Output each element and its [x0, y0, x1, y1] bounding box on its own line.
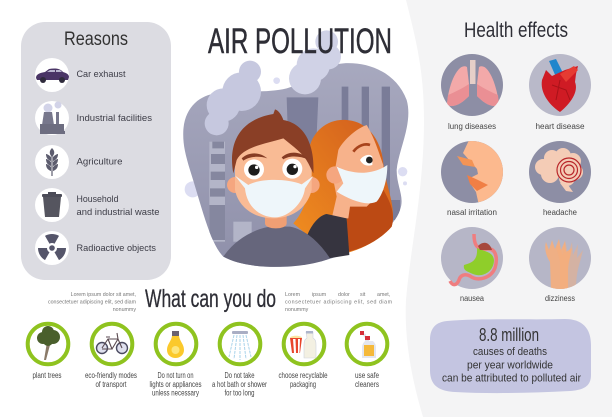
action: eco-friendly transport [85, 324, 137, 389]
action: lights [150, 324, 202, 398]
lorem text right: amet, [377, 292, 390, 298]
item: industrial facilities [35, 101, 152, 135]
action: lights: lights or appliances [150, 380, 202, 389]
lorem text right: consectetuer adipiscing elit, sed diam [285, 300, 393, 306]
item: car exhaust [35, 58, 126, 92]
callout: statistic: can be attributed to polluted air [442, 372, 581, 384]
effect: headache [529, 141, 591, 217]
smoke clouds [205, 61, 261, 135]
illustration: two people in masks [180, 30, 420, 273]
lorem text right: nonummy [285, 307, 309, 313]
action: eco-friendly transport: of transport [96, 380, 127, 389]
action: recyclable packaging: packaging [290, 380, 316, 389]
right background panel [406, 0, 612, 417]
lorem text right: Lorem [285, 292, 301, 298]
lorem text left [48, 292, 137, 313]
effect: heart disease [529, 54, 591, 131]
action: lights: unless necessary [152, 388, 199, 398]
effect: headache: headache [543, 208, 578, 217]
effect: heart disease: heart disease [536, 122, 585, 131]
polluted factory scene [183, 63, 408, 267]
effect: nausea [441, 227, 503, 303]
action: eco-friendly transport: eco-friendly modes [85, 371, 137, 380]
effect: dizziness: dizziness [545, 294, 575, 303]
item: agriculture [35, 145, 122, 179]
item: radioactive objects [35, 231, 156, 265]
lorem text right [285, 292, 393, 313]
panel: reasons [21, 22, 171, 280]
lorem text right: ipsum [312, 292, 327, 298]
decorative bubbles [185, 77, 407, 197]
callout: statistic: 8.8 million [479, 325, 539, 345]
effect: nasal irritation [441, 141, 503, 215]
action: plant trees: plant trees [32, 371, 62, 380]
item: household and industrial waste: and industrial waste [76, 207, 160, 218]
item: household and industrial waste: Household [76, 194, 118, 205]
action: safe cleaners: use safe [355, 371, 379, 380]
heading: what can you do: What can you do [145, 285, 276, 313]
man [223, 109, 330, 267]
action: safe cleaners [347, 324, 387, 389]
action: shower [212, 324, 267, 398]
action: recyclable packaging [278, 324, 328, 389]
effect: nausea: nausea [460, 294, 484, 303]
action: plant trees [28, 324, 68, 380]
lorem text right: dolor [338, 292, 350, 298]
item: radioactive objects: Radioactive objects [76, 243, 156, 254]
action: recyclable packaging: choose recyclable [278, 371, 328, 380]
action: shower: for too long [224, 388, 254, 398]
lorem text left: nonummy [113, 307, 136, 313]
callout: statistic: causes of deaths [473, 346, 547, 358]
lorem text left: Lorem ipsum dolor sit amet, [71, 292, 136, 298]
effect: nasal irritation: nasal irritation [447, 208, 497, 217]
effect: dizziness [529, 227, 591, 303]
title: AIR POLLUTION [208, 22, 392, 61]
heading: reasons: Reasons [64, 29, 128, 50]
callout: statistic [430, 319, 591, 393]
action: lights: Do not turn on [158, 371, 194, 380]
action: shower: a hot bath or shower [212, 380, 267, 389]
action: shower: Do not take [224, 371, 255, 380]
lorem text left: consectetuer adipiscing elit, sed diam [48, 300, 137, 306]
item: agriculture: Agriculture [76, 156, 122, 168]
effect: lung diseases [441, 54, 503, 131]
item: car exhaust: Car exhaust [76, 69, 126, 80]
action: safe cleaners: cleaners [355, 380, 379, 389]
callout: statistic: per year worldwide [467, 360, 553, 372]
woman [293, 120, 393, 258]
lorem text right: sit [360, 292, 366, 298]
heading: health effects: Health effects [464, 19, 568, 42]
effect: lung diseases: lung diseases [448, 122, 496, 131]
item: household and industrial waste [35, 188, 160, 222]
item: industrial facilities: Industrial facilities [76, 113, 152, 124]
